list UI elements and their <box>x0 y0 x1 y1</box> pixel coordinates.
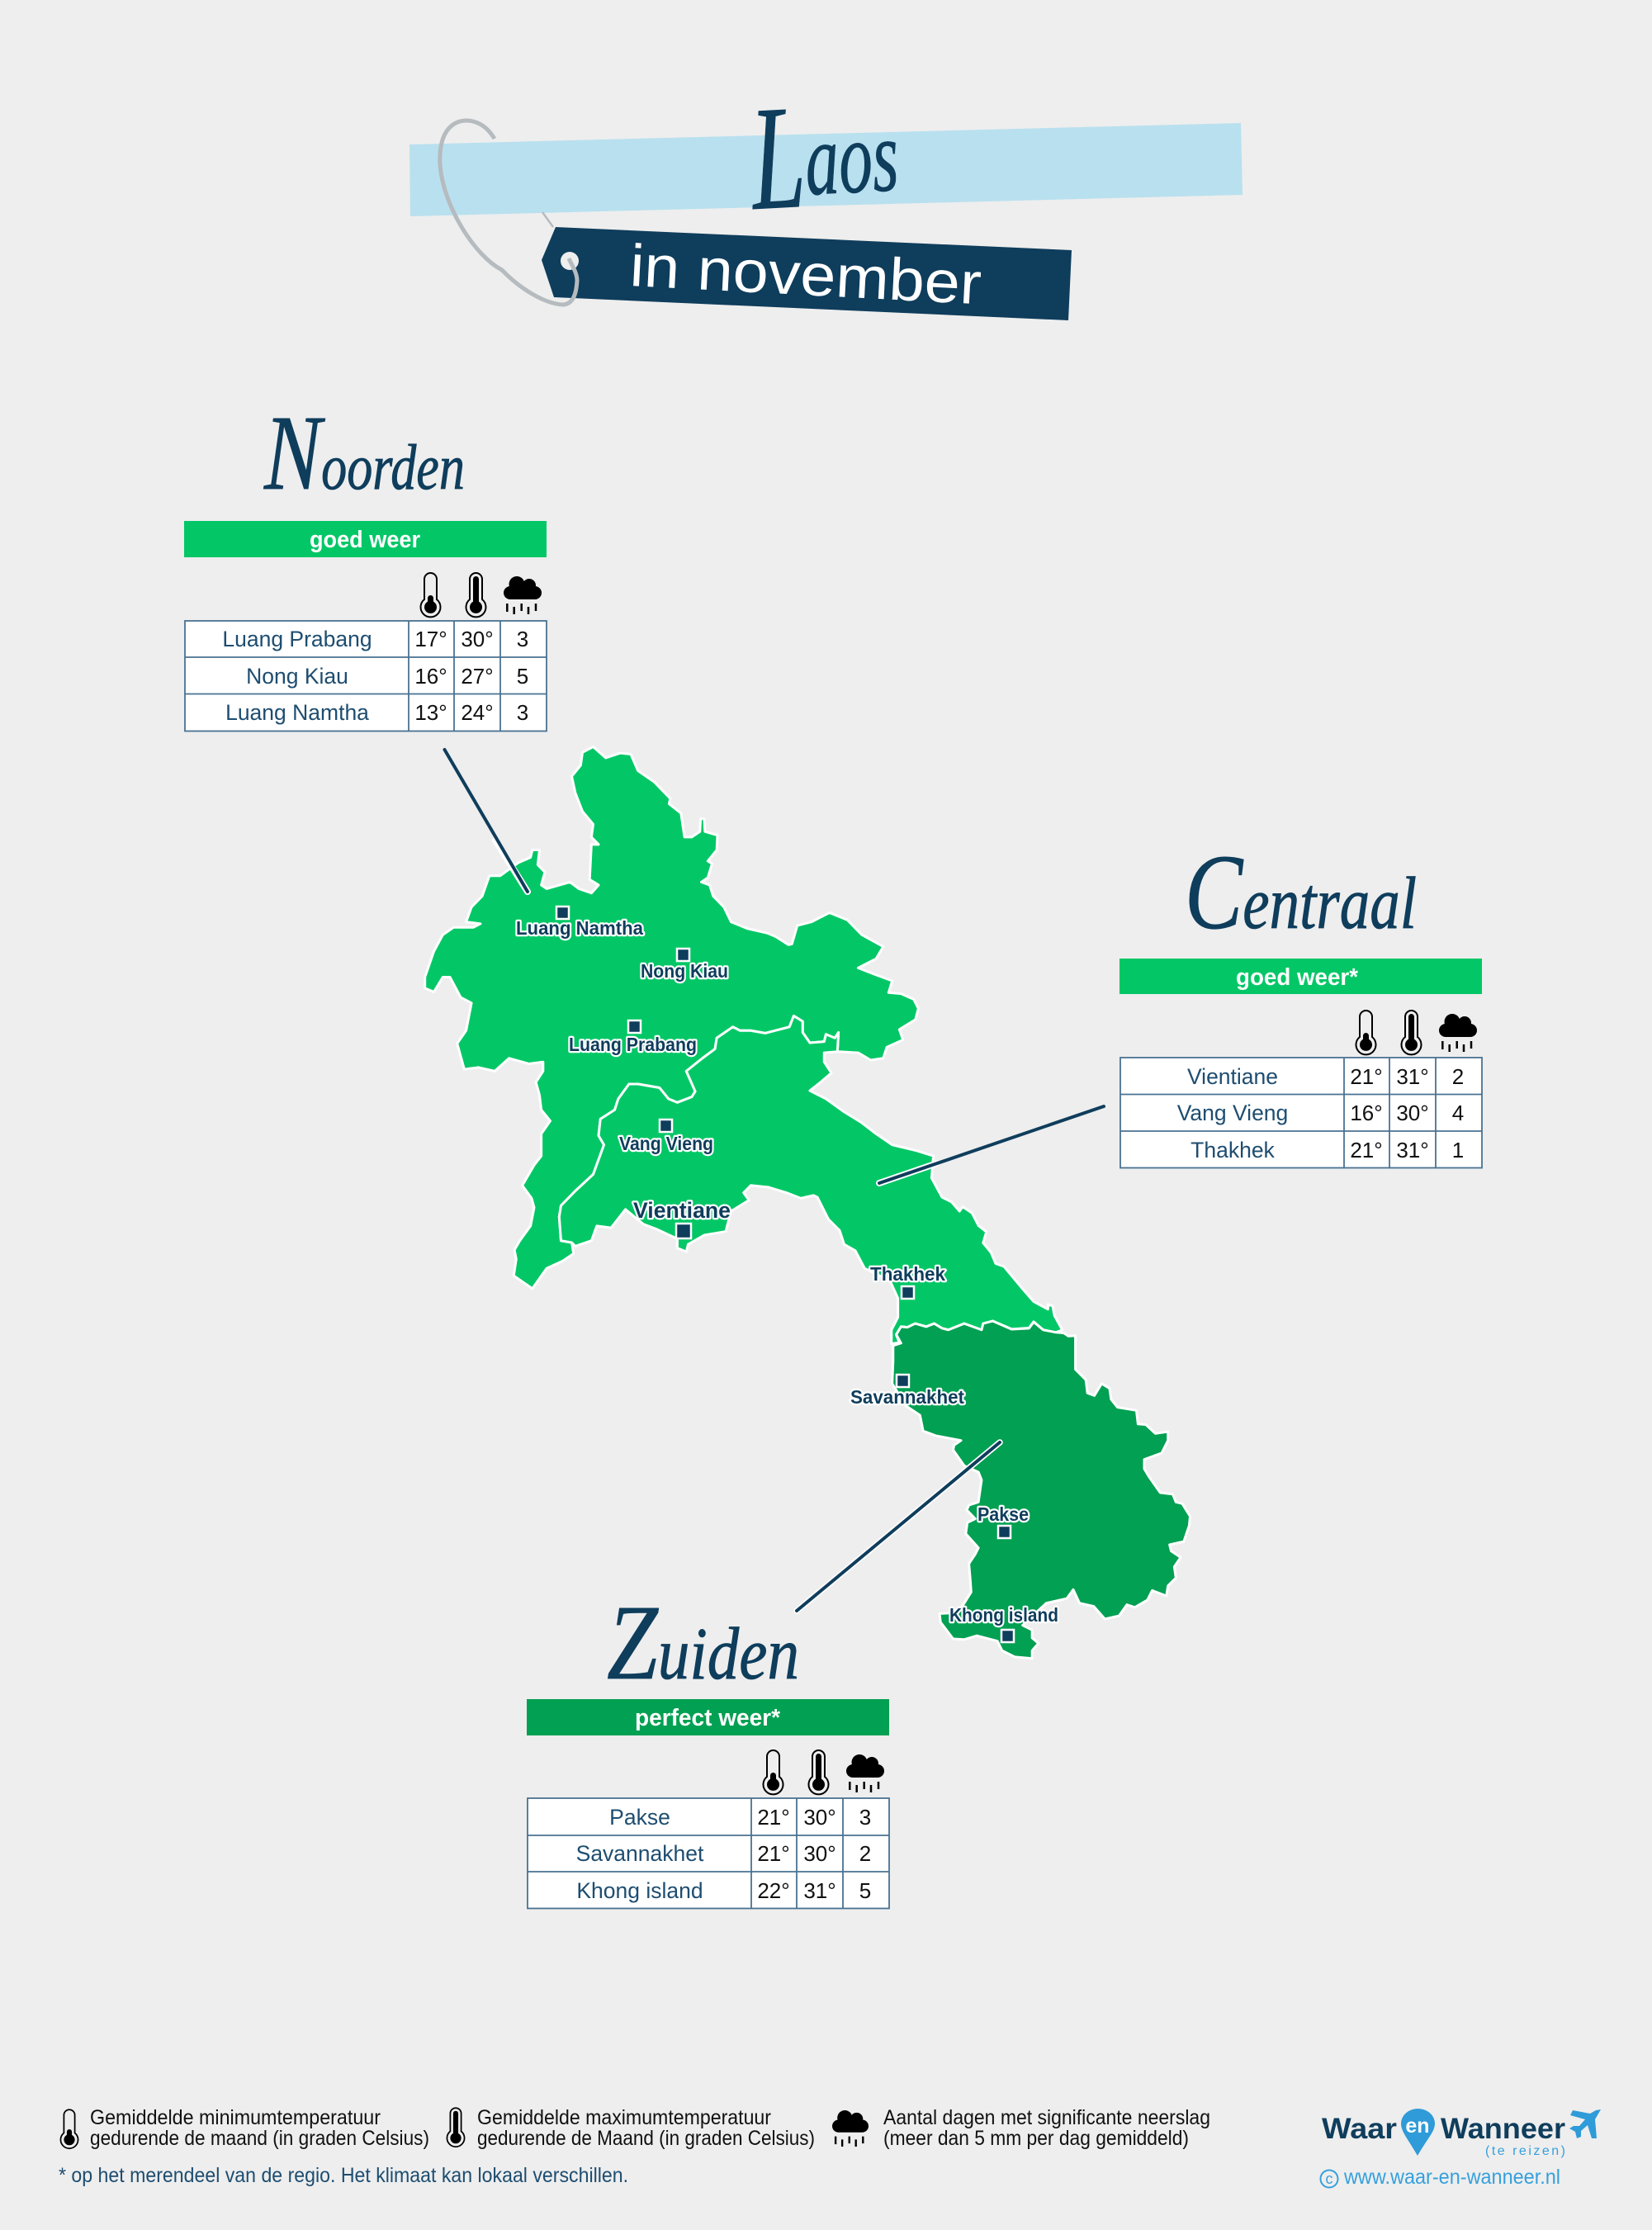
city: Luang Namtha: Luang Namtha <box>516 917 643 939</box>
climate table: Luang Namtha <box>225 700 369 725</box>
city: Pakse <box>977 1503 1029 1538</box>
logo: Waar en Wanneer <box>1321 2109 1601 2189</box>
climate table: 30° <box>461 627 494 651</box>
climate table: 3 <box>517 700 528 725</box>
climate table: 3 <box>859 1805 871 1830</box>
climate table: 31° <box>1396 1138 1429 1162</box>
logo tagline: (te reizen) <box>1485 2144 1565 2158</box>
city: Luang Prabang: Luang Prabang <box>569 1034 697 1055</box>
legend: precipitation: (meer dan 5 mm per dag gemiddeld) <box>883 2127 1189 2150</box>
climate table: 13° <box>414 700 447 725</box>
climate table: 21° <box>757 1805 790 1830</box>
country name: Laos: aos <box>802 99 901 218</box>
city: Vang Vieng: Vang Vieng <box>619 1133 713 1154</box>
climate table: 5 <box>859 1878 871 1903</box>
heading: Centraal: Centraal <box>1185 833 1417 952</box>
climate table: 21° <box>757 1841 790 1866</box>
climate table: Thakhek <box>1190 1138 1276 1162</box>
weather band: goed weer: goed weer <box>310 527 420 553</box>
icon: minimum temperature <box>1356 1011 1375 1054</box>
climate table: 5 <box>517 664 528 689</box>
leader line: central <box>879 1106 1104 1183</box>
climate table: 16° <box>1350 1101 1383 1125</box>
website: www.waar-en-wanneer.nl <box>1343 2166 1560 2189</box>
climate table: Nong Kiau <box>246 664 348 689</box>
climate table: 27° <box>461 664 494 689</box>
legend: minimum temperature <box>60 2106 429 2150</box>
panel: Centraal <box>1119 833 1482 1167</box>
city: Nong Kiau: Nong Kiau <box>641 960 728 982</box>
tag text: in november: in november <box>628 233 983 317</box>
weather band: perfect weer* <box>527 1699 889 1735</box>
climate table: 1 <box>1452 1138 1464 1162</box>
climate table: 3 <box>517 627 528 651</box>
leader line: north <box>444 750 528 892</box>
tag string <box>440 121 577 305</box>
climate table: 2 <box>859 1841 871 1866</box>
climate table: 22° <box>757 1878 790 1903</box>
title banner <box>409 69 1243 320</box>
climate table: 17° <box>414 627 447 651</box>
city: Luang Namtha <box>516 907 643 939</box>
city: Savannakhet <box>850 1375 964 1408</box>
climate table: 31° <box>803 1878 836 1903</box>
logo pin <box>1401 2109 1435 2156</box>
legend: maximum temperature <box>447 2106 815 2150</box>
legend: minimum temperature: Gemiddelde minimumtemperatuur <box>90 2106 381 2129</box>
legend: precipitation <box>832 2106 1210 2150</box>
weather band: perfect weer*: perfect weer* <box>635 1705 781 1731</box>
logo pin: en <box>1405 2114 1430 2138</box>
climate table: 30° <box>803 1805 836 1830</box>
icon: plane <box>1569 2109 1601 2138</box>
footnote: * op het merendeel van de regio. Het klimaat kan lokaal verschillen. <box>59 2164 628 2187</box>
legend: precipitation: Aantal dagen met significante neerslag <box>883 2106 1210 2129</box>
icon: minimum temperature <box>421 573 441 617</box>
region: central <box>559 1016 1063 1344</box>
climate table <box>528 1798 889 1909</box>
heading: Zuiden: Zuiden <box>607 1584 799 1702</box>
country name: Laos: L <box>746 74 809 241</box>
climate table: 24° <box>461 700 494 725</box>
panel: Noorden <box>184 394 547 731</box>
city: Vang Vieng <box>619 1120 713 1154</box>
climate table: 31° <box>1396 1064 1429 1089</box>
leader line: south <box>797 1442 1000 1611</box>
climate table: Pakse <box>609 1805 670 1830</box>
tag hole <box>561 252 579 270</box>
weather band: goed weer* <box>1119 959 1482 994</box>
city: Pakse: Pakse <box>977 1503 1029 1525</box>
weather band: goed weer*: goed weer* <box>1236 964 1359 991</box>
region: north <box>425 747 918 1289</box>
city: Khong island <box>949 1604 1058 1642</box>
icon: rain cloud <box>1439 1014 1477 1052</box>
logo word: Wanneer: Wanneer <box>1441 2113 1565 2145</box>
icon: maximum temperature <box>809 1750 829 1794</box>
icon: rain cloud <box>846 1754 884 1792</box>
panel: Zuiden <box>527 1584 889 1909</box>
logo word: Waar: Waar <box>1322 2113 1397 2145</box>
city: Khong island: Khong island <box>949 1604 1058 1626</box>
climate table <box>185 621 547 731</box>
website: c <box>1326 2171 1332 2187</box>
city: Vientiane: Vientiane <box>633 1198 731 1223</box>
climate table: Luang Prabang <box>222 627 372 651</box>
climate table: 16° <box>414 664 447 689</box>
climate table: 2 <box>1452 1064 1464 1089</box>
legend <box>59 2106 1210 2187</box>
climate table <box>1120 1058 1482 1167</box>
city: Thakhek <box>870 1263 945 1299</box>
icon: maximum temperature <box>1402 1011 1422 1054</box>
climate table: Vang Vieng <box>1177 1101 1288 1125</box>
legend: maximum temperature: Gemiddelde maximumtemperatuur <box>477 2106 771 2129</box>
icon: rain cloud <box>504 576 542 614</box>
navy tag <box>542 227 1072 320</box>
light blue title band <box>409 123 1243 216</box>
climate table: Khong island <box>576 1878 703 1903</box>
weather band: goed weer <box>184 521 547 557</box>
legend: maximum temperature: gedurende de Maand (in graden Celsius) <box>477 2127 815 2150</box>
city: Thakhek: Thakhek <box>870 1263 945 1285</box>
climate table: 30° <box>1396 1101 1429 1125</box>
climate table: Vientiane <box>1187 1064 1278 1089</box>
city: Nong Kiau <box>641 949 728 982</box>
climate table: Savannakhet <box>576 1841 704 1866</box>
legend: minimum temperature: gedurende de maand (in graden Celsius) <box>90 2127 429 2150</box>
climate table: 21° <box>1350 1064 1383 1089</box>
climate table: 30° <box>803 1841 836 1866</box>
map of Laos <box>425 747 1190 1659</box>
climate table: 21° <box>1350 1138 1383 1162</box>
icon: minimum temperature <box>763 1750 783 1794</box>
climate table: 4 <box>1452 1101 1464 1125</box>
city: Savannakhet: Savannakhet <box>850 1386 964 1408</box>
city: Luang Prabang <box>569 1020 697 1055</box>
city: Vientiane <box>633 1198 731 1238</box>
heading: Noorden: Noorden <box>263 394 465 513</box>
icon: maximum temperature <box>466 573 485 617</box>
region: south <box>892 1321 1190 1659</box>
